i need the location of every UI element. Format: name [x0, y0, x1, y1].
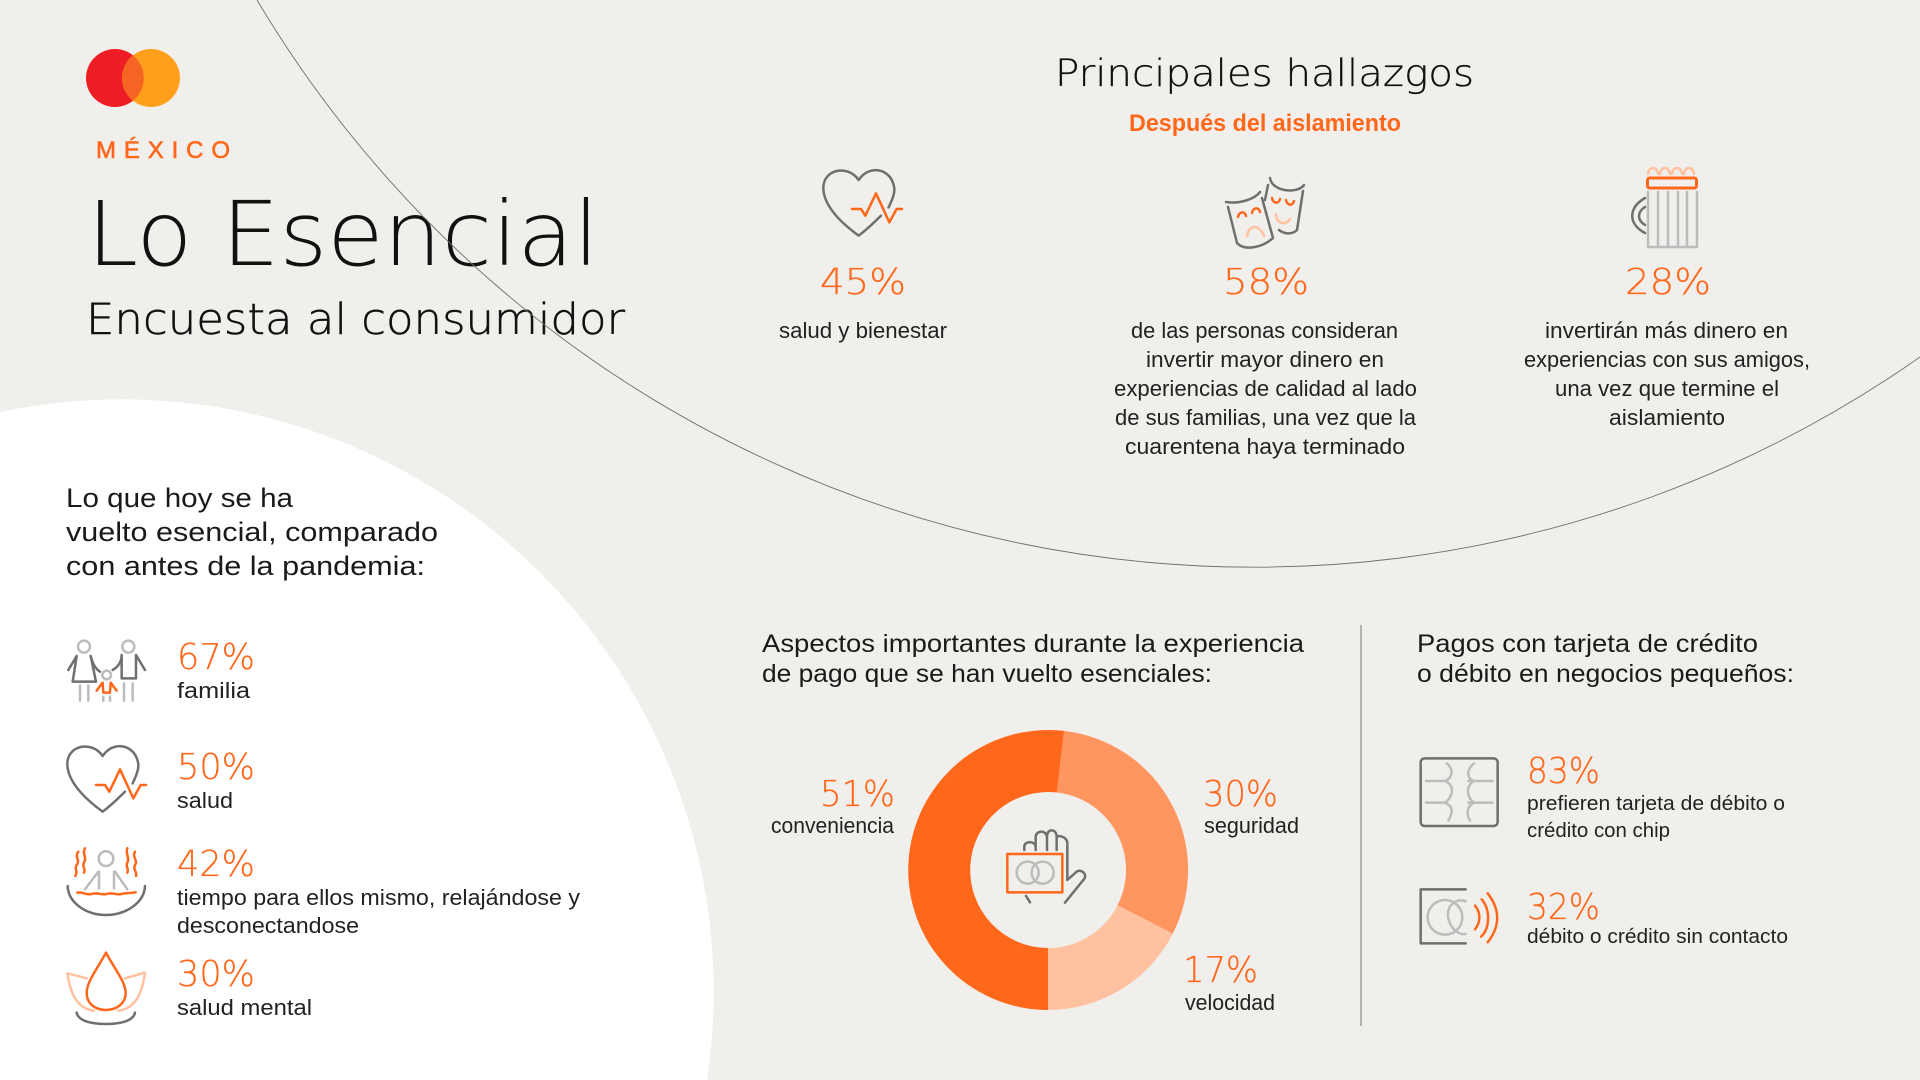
description: una vez que termine el — [1555, 376, 1779, 401]
heading: lo que hoy: Lo que hoy se ha — [66, 483, 294, 513]
stat: tiempo: 42% — [177, 844, 255, 885]
donut label: conveniencia: conveniencia — [771, 813, 895, 838]
stat: chip: crédito con chip — [1527, 820, 1670, 842]
heading: aspectos importantes — [762, 630, 1304, 688]
stat: salud — [177, 747, 255, 813]
white background circle panel — [0, 399, 714, 1080]
donut label: conveniencia — [771, 774, 895, 838]
description — [1524, 318, 1810, 430]
logo — [86, 49, 180, 107]
panel: finding 28% — [1524, 168, 1810, 430]
donut label: seguridad: 30% — [1203, 774, 1278, 815]
stat: salud: 50% — [177, 747, 255, 788]
stat: contactless — [1527, 887, 1788, 948]
stat: salud: salud — [177, 788, 233, 813]
heading: aspectos importantes: de pago que se han vuelto esenciales: — [762, 660, 1212, 688]
panel: finding 45% — [779, 170, 947, 343]
stat: tiempo — [177, 844, 580, 938]
donut chart — [908, 730, 1188, 1010]
donut label: seguridad: seguridad — [1204, 813, 1299, 838]
country label: MÉXICO — [96, 137, 230, 164]
icon: contactless card — [1421, 889, 1497, 943]
description: invertirán más dinero en — [1545, 318, 1788, 343]
donut label: velocidad: velocidad — [1185, 990, 1275, 1015]
donut label: conveniencia: 51% — [820, 774, 895, 815]
description: experiencias con sus amigos, — [1524, 347, 1810, 372]
icon: health heart — [67, 746, 146, 812]
stat: contactless: 32% — [1527, 887, 1600, 928]
description: de sus familias, una vez que la — [1115, 405, 1417, 430]
donut label: velocidad: 17% — [1183, 950, 1258, 991]
stat: chip — [1527, 751, 1785, 842]
icon: theatre masks — [1226, 178, 1304, 248]
heading: pagos con tarjeta — [1417, 630, 1794, 688]
thin arc line — [257, 0, 1920, 567]
label: salud y bienestar — [779, 318, 947, 343]
stat: contactless: débito o crédito sin contacto — [1527, 926, 1788, 948]
stat: familia: familia — [177, 678, 251, 703]
heading: lo que hoy: con antes de la pandemia: — [66, 551, 425, 581]
heading: lo que hoy — [66, 483, 438, 581]
icon: relaxing person — [68, 848, 145, 915]
description: aislamiento — [1609, 405, 1725, 430]
subtitle: Encuesta al consumidor — [86, 295, 625, 345]
stat: 28% — [1625, 262, 1711, 303]
stat: chip: 83% — [1527, 751, 1600, 792]
heading: pagos con tarjeta: o débito en negocios pequeños: — [1417, 660, 1794, 688]
panel: essentials list — [67, 637, 580, 1024]
description: invertir mayor dinero en — [1146, 347, 1384, 372]
icon: family — [68, 641, 145, 701]
icon: hand with card — [1007, 830, 1085, 903]
icon: chip card — [1421, 758, 1498, 826]
heading: lo que hoy: vuelto esencial, comparado — [66, 517, 438, 547]
stat: 45% — [820, 262, 906, 303]
stat: familia: 67% — [177, 637, 255, 678]
panel: finding 58% — [1114, 178, 1417, 459]
stat: salud mental: salud mental — [177, 995, 312, 1020]
stat: tiempo: tiempo para ellos mismo, relajándose y — [177, 885, 580, 910]
stat: salud mental — [177, 954, 312, 1020]
icon: heart pulse — [823, 170, 902, 236]
heading: pagos con tarjeta: Pagos con tarjeta de crédito — [1417, 630, 1758, 658]
description: experiencias de calidad al lado — [1114, 376, 1417, 401]
stat: tiempo: desconectandose — [177, 913, 359, 938]
main title: Lo Esencial — [87, 182, 599, 286]
subheading: después del aislamiento: Después del aislamiento — [1129, 110, 1401, 137]
donut label: velocidad — [1183, 950, 1275, 1015]
stat: 58% — [1223, 262, 1309, 303]
description — [1114, 318, 1417, 459]
heading: principales hallazgos: Principales hallazgos — [1055, 52, 1474, 95]
stat: chip: prefieren tarjeta de débito o — [1527, 793, 1785, 815]
description: de las personas consideran — [1131, 318, 1398, 343]
donut label: seguridad — [1203, 774, 1299, 838]
icon: mug with friends — [1632, 168, 1697, 247]
stat: familia — [177, 637, 255, 703]
description: cuarentena haya terminado — [1125, 434, 1405, 459]
heading: aspectos importantes: Aspectos importantes durante la experiencia — [762, 630, 1304, 658]
stat: salud mental: 30% — [177, 954, 255, 995]
icon: lotus drop — [67, 953, 145, 1024]
